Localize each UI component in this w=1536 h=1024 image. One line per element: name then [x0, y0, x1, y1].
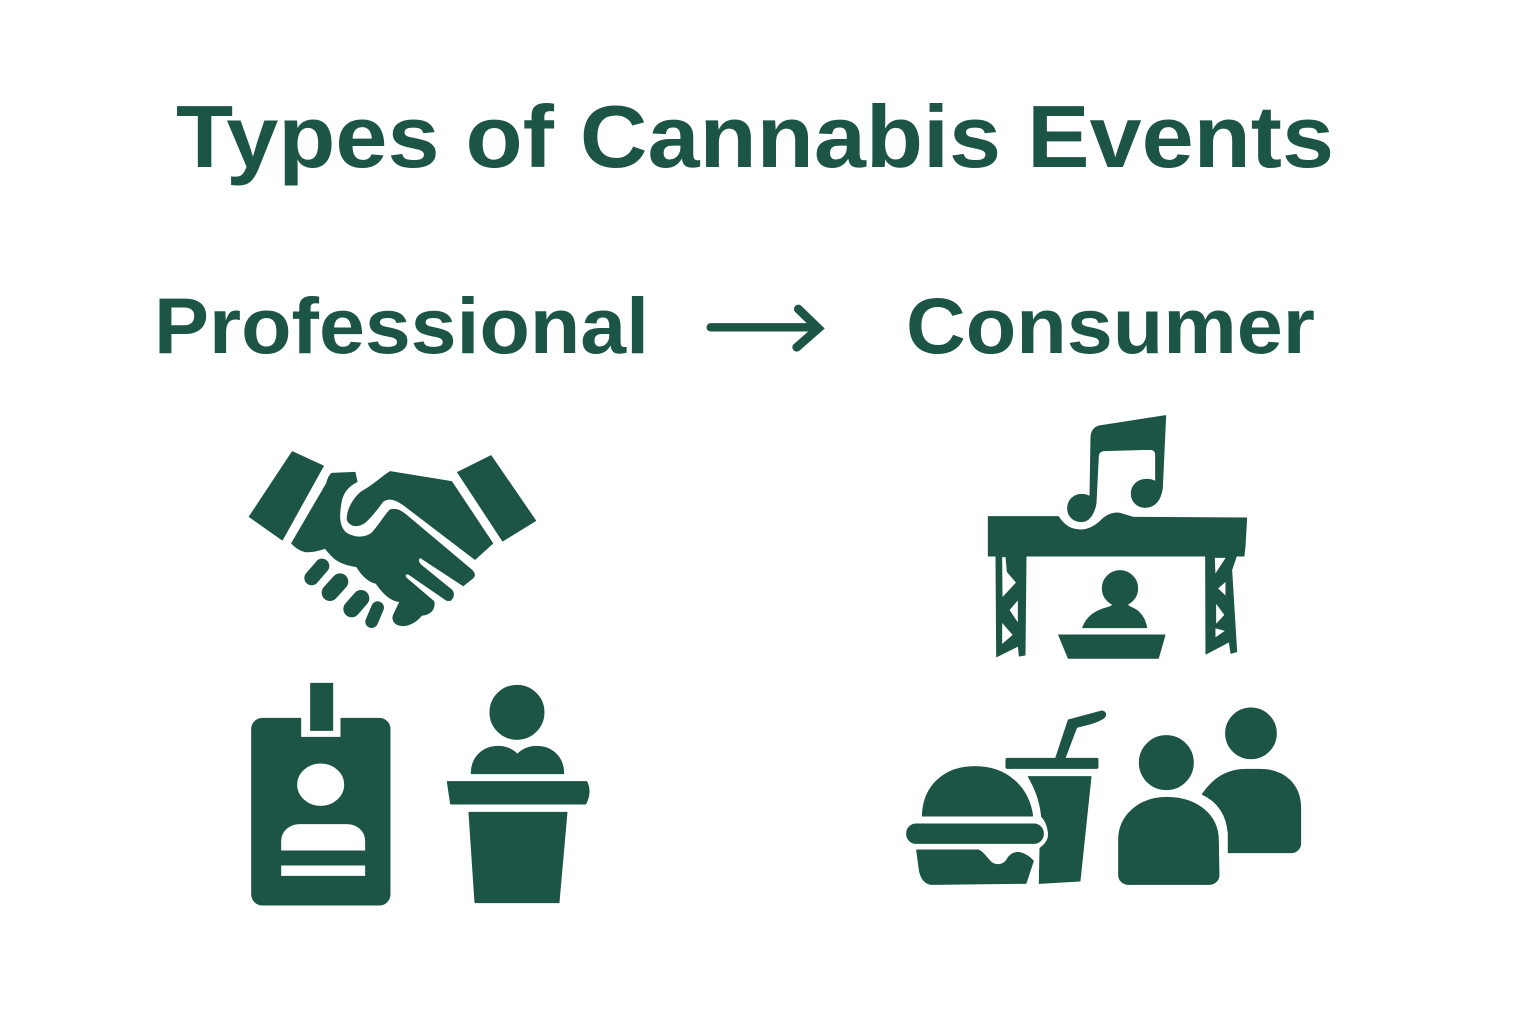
title: Types of Cannabis Events — [176, 87, 1334, 186]
heading: consumer: Consumer — [906, 281, 1315, 370]
icon: group of people — [1119, 708, 1301, 884]
icon: speaker at podium — [447, 685, 589, 903]
icon: ID badge — [252, 683, 390, 905]
icon: handshake — [249, 452, 536, 626]
icon: burger and drink — [907, 711, 1106, 884]
heading: professional: Professional — [154, 281, 649, 370]
icon: music stage — [988, 416, 1247, 658]
arrow: professional to consumer — [711, 309, 818, 347]
